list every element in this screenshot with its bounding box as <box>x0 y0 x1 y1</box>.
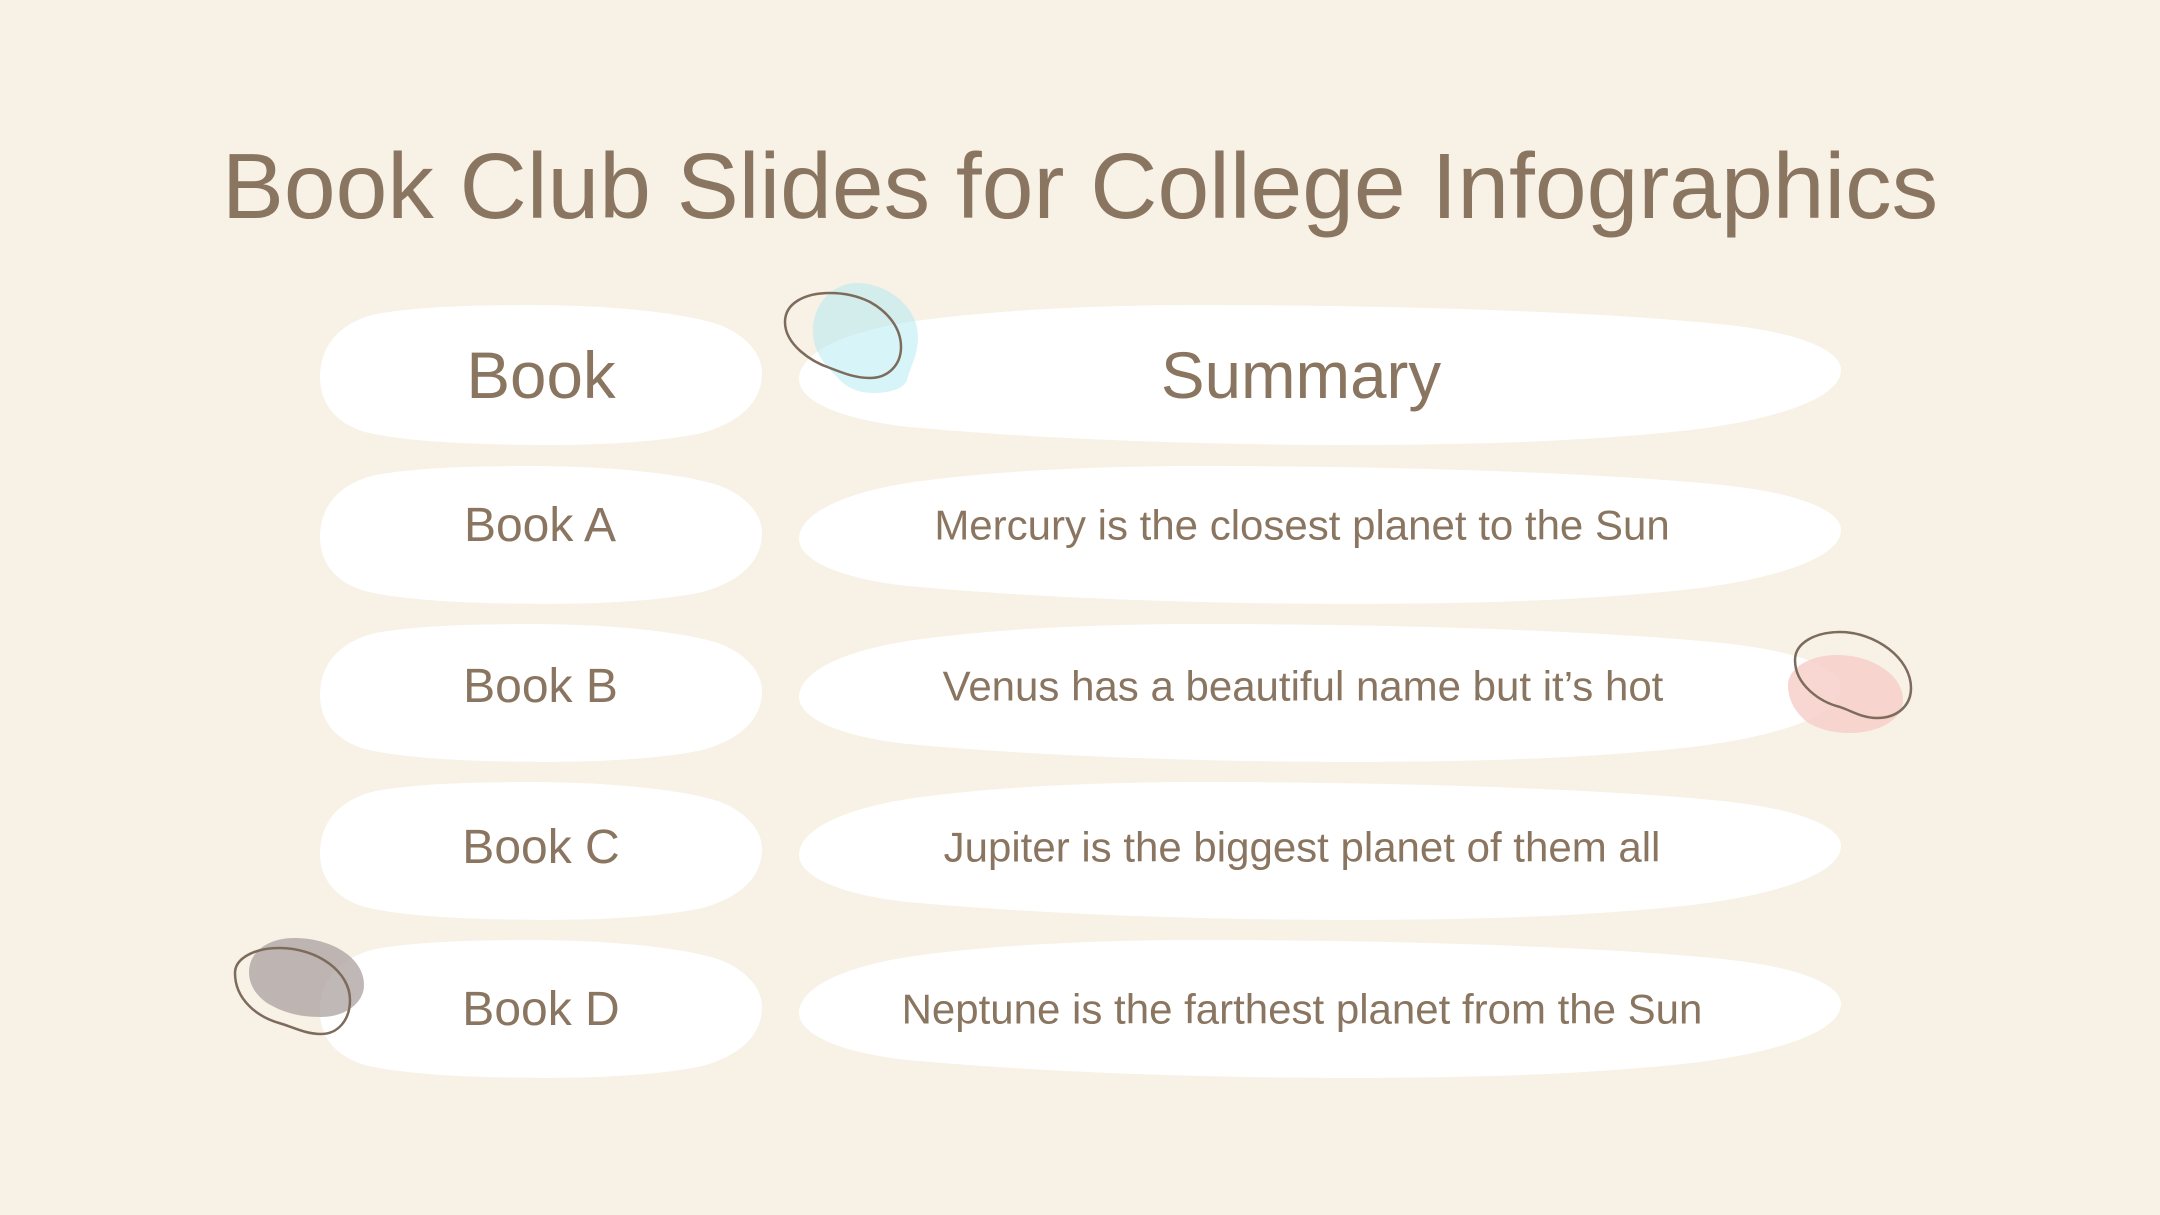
header cell: Summary <box>799 305 1841 445</box>
decoration: teal blob with outline <box>785 283 918 393</box>
book cell A <box>320 466 762 604</box>
header cell: Book: Book <box>466 339 616 412</box>
summary cell A <box>799 466 1841 604</box>
book cell C <box>320 782 762 920</box>
summary cell A: Mercury is the closest planet to the Sun <box>934 502 1670 548</box>
summary cell C <box>799 782 1841 920</box>
book cell B <box>320 624 762 762</box>
book cell D <box>320 940 762 1078</box>
table row: Book B <box>320 624 1841 762</box>
header cell: Summary: Summary <box>1161 339 1441 412</box>
book cell C: Book C <box>462 821 620 874</box>
book cell D: Book D <box>462 983 620 1036</box>
summary cell C: Jupiter is the biggest planet of them all <box>944 824 1660 870</box>
table header row <box>320 305 1841 445</box>
decoration: grey blob with outline <box>235 938 364 1034</box>
summary cell B: Venus has a beautiful name but it’s hot <box>943 662 1664 710</box>
book cell B: Book B <box>463 660 618 713</box>
book cell A: Book A <box>464 499 616 552</box>
title: Book Club Slides for College Infographics <box>222 134 1938 238</box>
table row: Book D <box>320 940 1841 1078</box>
summary cell D: Neptune is the farthest planet from the Sun <box>902 986 1702 1032</box>
decoration: pink blob with outline <box>1788 632 1911 733</box>
summary cell D <box>799 940 1841 1078</box>
table row: Book C <box>320 782 1841 920</box>
header cell: Book <box>320 305 762 445</box>
table row: Book A <box>320 466 1841 604</box>
summary cell B <box>799 624 1841 762</box>
